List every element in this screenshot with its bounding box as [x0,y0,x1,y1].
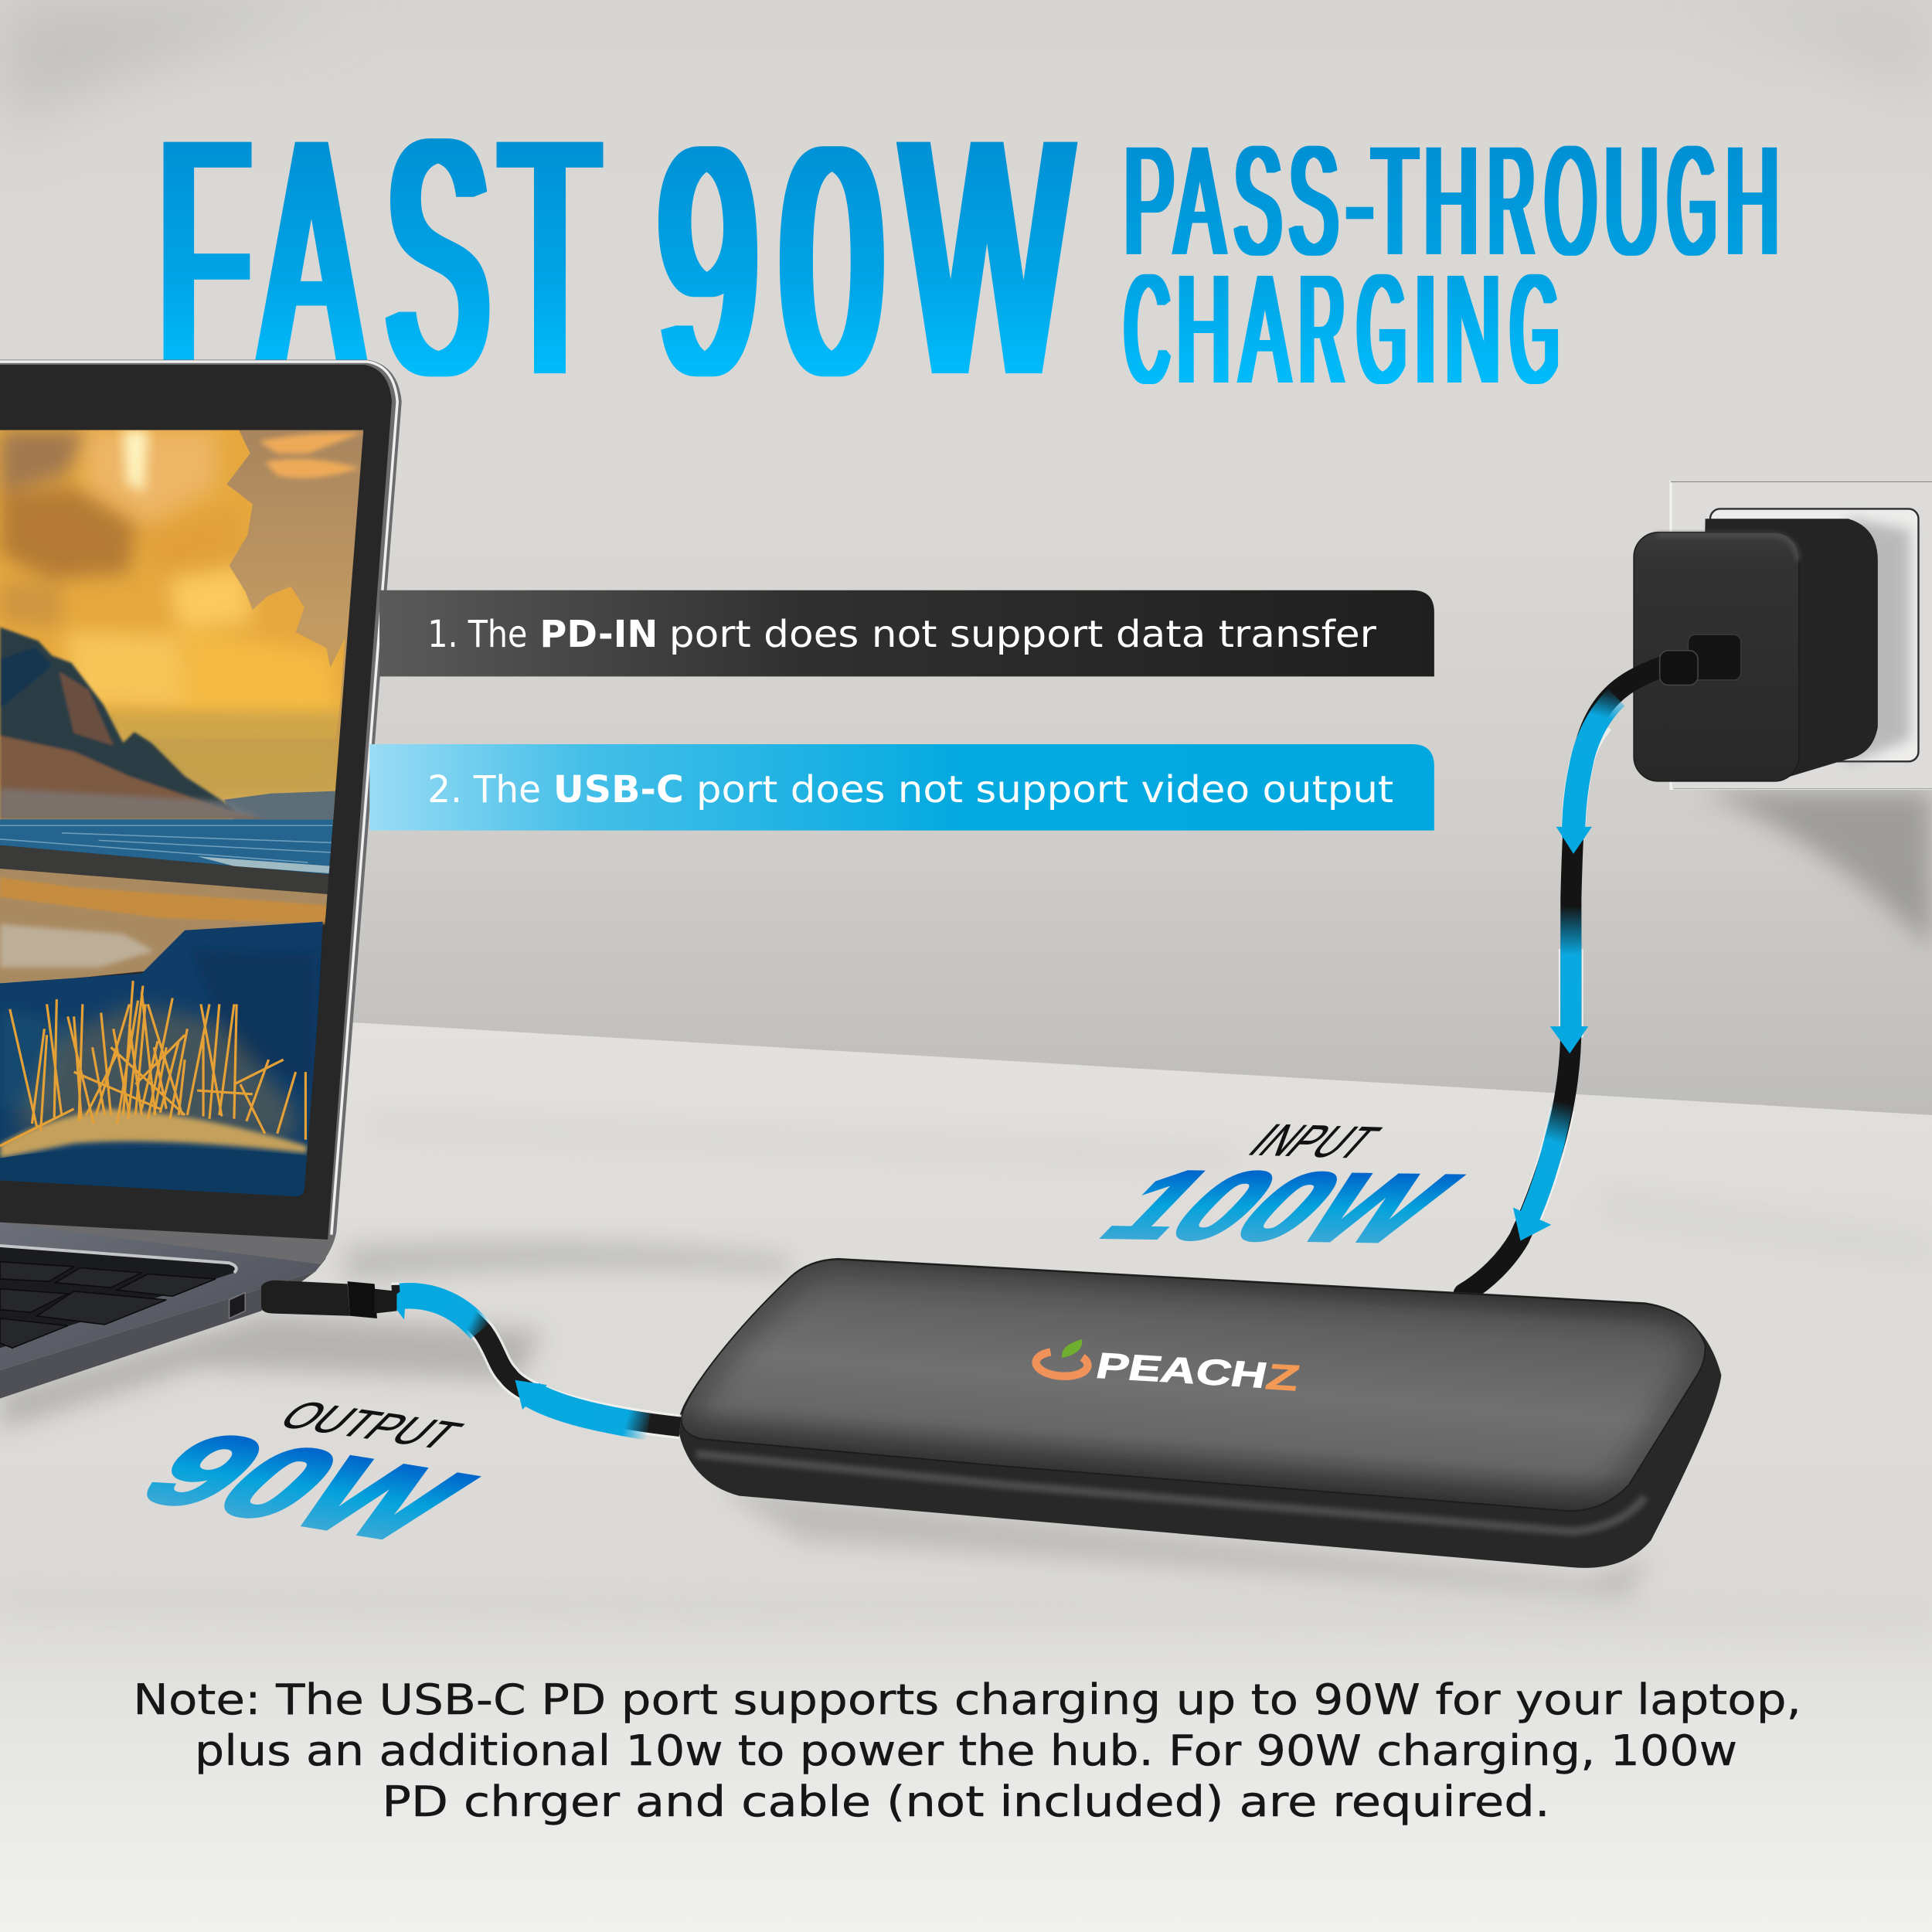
title: FAST 90W: 9 [658,80,757,443]
arrow: input bottom [1513,1207,1551,1241]
wall charger [1634,519,1878,781]
logo: PEACHZ: PEACH [1093,1345,1271,1396]
title: FAST 90W [160,70,1071,445]
title: FAST 90W: F [160,70,249,445]
note text [133,1675,1801,1826]
banner 1 text: port does not support data transfer [669,614,1376,656]
title: FAST 90W: W [904,70,1071,445]
power bank [679,1258,1721,1568]
charger plug [1660,651,1698,685]
title: FAST 90W: 0 [781,80,883,443]
banner 2 text: USB-C [553,769,684,811]
output wattage: 90W [110,1413,498,1562]
banner 2 text [427,769,1393,811]
title: FAST 90W: A [261,70,362,445]
logo leaf [1062,1339,1082,1358]
wall socket plate [1671,481,1932,788]
title: FAST 90W: T [502,70,598,445]
laptop screen photo [0,430,369,1202]
subtitle: pass-through charging: G [1511,242,1559,416]
subtitle: pass-through charging: T [1372,114,1417,287]
logo: PEACHZ [1036,1339,1303,1398]
output caption: OUTPUT [268,1393,472,1457]
note text: Note: The USB-C PD port supports charging up to 90W for your laptop, [133,1675,1801,1724]
title: FAST 90W: S [387,70,488,445]
subtitle: pass-through charging: - [1346,114,1373,287]
subtitle: pass-through charging: I [1413,242,1437,416]
laptop lid [0,360,402,1264]
mountain [0,628,265,819]
subtitle: pass-through charging: H [1424,114,1478,287]
clouds [0,430,363,794]
USB-C plug at laptop [261,1281,396,1318]
subtitle: pass-through charging: S [1289,114,1338,287]
arrow: output lower [515,1380,547,1410]
output cable with arrows [389,1287,680,1427]
banner 1 text: PD-IN [539,614,658,656]
charger USB port [1688,634,1741,680]
subtitle: pass-through charging: G [1357,242,1406,416]
background: wall [0,0,1932,1134]
arrow: output upper [389,1287,406,1320]
input label [1076,1115,1482,1262]
banner 1 text [427,614,1376,656]
output label [110,1393,498,1562]
subtitle: pass-through charging: G [1668,114,1716,287]
input cable with arrows [1464,651,1698,1294]
subtitle: pass-through charging: A [1175,114,1224,287]
keyboard [0,1246,236,1348]
banner 2 text: 2. The [427,769,541,811]
laptop [0,360,402,1399]
background: table surface [0,1022,1932,1932]
dark foreground sand [0,1148,307,1196]
subtitle: pass-through charging: P [1124,114,1174,287]
text: H [1726,114,1779,287]
subtitle: pass-through charging: R [1488,114,1535,287]
subtitle: pass-through charging: A [1240,242,1289,416]
subtitle: pass-through charging: R [1299,242,1345,416]
input wattage: 100W [1076,1151,1482,1262]
note text: plus an additional 10w to power the hub. For 90W charging, 100w [195,1726,1737,1775]
subtitle: pass-through charging: S [1234,114,1281,287]
sea [0,819,335,875]
subtitle: pass-through charging: U [1604,114,1658,287]
beach and sand [0,845,332,1198]
laptop side port [230,1293,245,1318]
input caption: INPUT [1236,1115,1391,1168]
subtitle: pass-through charging: N [1445,242,1501,416]
banner 1 text: 1. The [427,614,527,656]
laptop deck [0,1219,332,1370]
banner 1: PD-IN note [379,590,1434,676]
subtitle: pass-through charging: O [1546,114,1596,287]
logo: PEACHZ: Z [1263,1356,1303,1398]
grass [0,981,307,1158]
banner 2 text: port does not support video output [696,769,1393,811]
note text: PD chrger and cable (not included) are required. [382,1777,1550,1826]
laptop base side [0,1271,315,1399]
banner 2: USB-C note [369,744,1434,831]
subtitle: pass-through charging [1124,114,1779,416]
arrow: input middle [1550,1026,1588,1053]
arrow: input top [1556,827,1592,854]
far hills [224,791,335,819]
subtitle: pass-through charging: C [1124,242,1169,416]
logo ring [1036,1351,1088,1378]
subtitle: pass-through charging: H [1177,242,1230,416]
